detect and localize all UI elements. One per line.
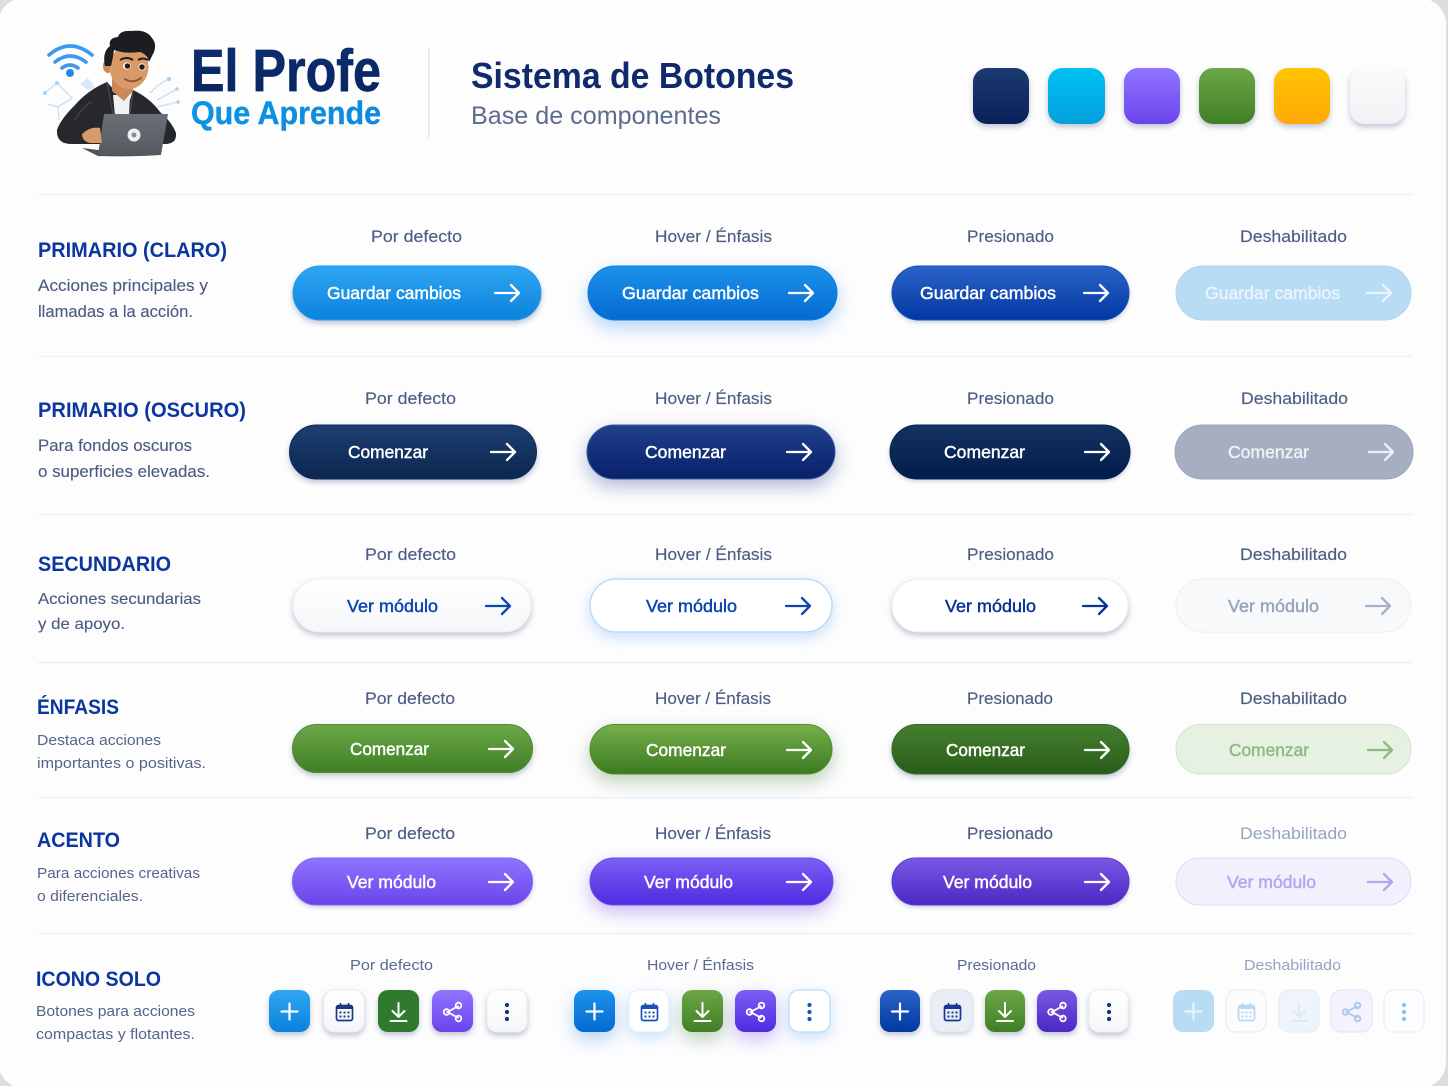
icon buttons: pressed [880,990,1128,1032]
row description: o diferenciales. [37,888,143,905]
logo tagline: Que Aprende [191,95,381,131]
button: hover: Comenzar [645,442,726,462]
button: pressed [890,425,1130,479]
row description: Para acciones creativas [37,865,200,882]
state labels: Hover / Énfasis [647,957,754,974]
row description [37,732,206,772]
button: hover [590,858,833,905]
button: disabled: Comenzar [1229,740,1309,760]
state labels [371,227,1347,246]
button: disabled: Comenzar [1228,442,1309,462]
button: disabled [1176,858,1411,905]
state labels: Presionado [967,545,1054,564]
state labels: Presionado [967,824,1053,843]
button: default [292,724,532,772]
row heading: ACENTO [37,828,120,852]
button: pressed [892,579,1128,632]
state labels: Por defecto [365,689,455,708]
row heading: PRIMARIO (CLARO) [38,238,227,262]
title: Sistema de Botones [471,55,794,96]
button: default [293,579,531,632]
button: pressed: Comenzar [944,442,1025,462]
state labels: Presionado [957,957,1036,974]
state labels: Deshabilitado [1241,389,1348,408]
state labels: Deshabilitado [1240,689,1347,708]
row description: compactas y flotantes. [36,1026,195,1043]
row description [38,437,210,481]
button: default: Comenzar [350,739,429,759]
button: default: Comenzar [348,442,428,462]
row: secundario [38,545,1411,633]
button: pressed [892,724,1129,774]
icon buttons: hover [574,990,830,1032]
row: acento [37,824,1411,905]
button: default [292,858,532,905]
button: default: Ver módulo [347,872,436,892]
button: hover: Comenzar [646,740,726,760]
button: default: Ver módulo [347,596,438,616]
row: primario oscuro [38,389,1413,481]
button: pressed: Guardar cambios [920,283,1056,303]
state labels: Hover / Énfasis [655,389,772,408]
button: default [290,425,536,479]
button: disabled: Ver módulo [1228,596,1319,616]
state labels [365,824,1347,843]
logo illustration: teacher with laptop [43,31,180,156]
row description: importantes o positivas. [37,755,206,772]
state labels: Por defecto [350,957,433,974]
button: pressed: Ver módulo [943,872,1032,892]
state labels: Deshabilitado [1240,824,1347,843]
button: disabled: Ver módulo [1227,872,1316,892]
state labels: Presionado [967,227,1054,246]
button: pressed [892,858,1129,905]
button: hover: Ver módulo [646,596,737,616]
row description: llamadas a la acción. [38,303,193,321]
row description: o superficies elevadas. [38,463,210,481]
state labels [365,545,1347,564]
subtitle: Base de componentes [471,102,721,130]
button: disabled [1175,425,1413,479]
state labels: Hover / Énfasis [655,689,771,708]
button: pressed: Comenzar [946,740,1025,760]
state labels [350,957,1341,974]
row description: Acciones principales y [38,277,209,295]
button: pressed: Ver módulo [945,596,1036,616]
button: hover [590,724,832,774]
row description [38,277,209,321]
button: hover [590,579,832,632]
state labels: Presionado [967,689,1053,708]
state labels [365,689,1347,708]
button: hover [588,266,837,320]
row description: y de apoyo. [38,616,125,633]
icon buttons: default [269,990,527,1032]
row heading: SECUNDARIO [38,552,171,576]
button: disabled [1176,579,1411,632]
row description: Botones para acciones [36,1003,195,1020]
row: icono solo [36,957,1424,1043]
state labels: Deshabilitado [1244,957,1341,974]
button: disabled [1176,266,1411,320]
logo [43,31,381,156]
state labels: Deshabilitado [1240,227,1347,246]
state labels [365,389,1348,408]
icon buttons: disabled [1173,990,1424,1032]
row heading: ÉNFASIS [37,694,119,719]
state labels: Hover / Énfasis [655,545,772,564]
button: default [293,266,541,320]
button: disabled [1176,724,1411,774]
state labels: Por defecto [365,545,456,564]
state labels: Por defecto [365,824,455,843]
row heading: ICONO SOLO [36,967,161,991]
button: hover: Guardar cambios [622,283,759,303]
row description [36,1003,195,1043]
state labels: Deshabilitado [1240,545,1347,564]
button: default: Guardar cambios [327,283,461,303]
button: hover [587,425,835,479]
row description: Acciones secundarias [38,591,201,608]
state labels: Por defecto [371,227,462,246]
header [43,31,1405,156]
button: pressed [892,266,1129,320]
button: disabled: Guardar cambios [1205,283,1340,303]
row description [37,865,200,905]
button: hover: Ver módulo [644,872,733,892]
state labels: Hover / Énfasis [655,824,771,843]
row description: Destaca acciones [37,732,161,749]
state labels: Hover / Énfasis [655,227,772,246]
colour swatches [973,68,1405,124]
row heading: PRIMARIO (OSCURO) [38,398,246,422]
row: enfasis [37,689,1411,774]
row description: Para fondos oscuros [38,437,192,455]
state labels: Presionado [967,389,1054,408]
logo wordmark: El Profe [191,38,381,104]
row description [38,591,201,633]
state labels: Por defecto [365,389,456,408]
row: primario claro [38,227,1411,321]
